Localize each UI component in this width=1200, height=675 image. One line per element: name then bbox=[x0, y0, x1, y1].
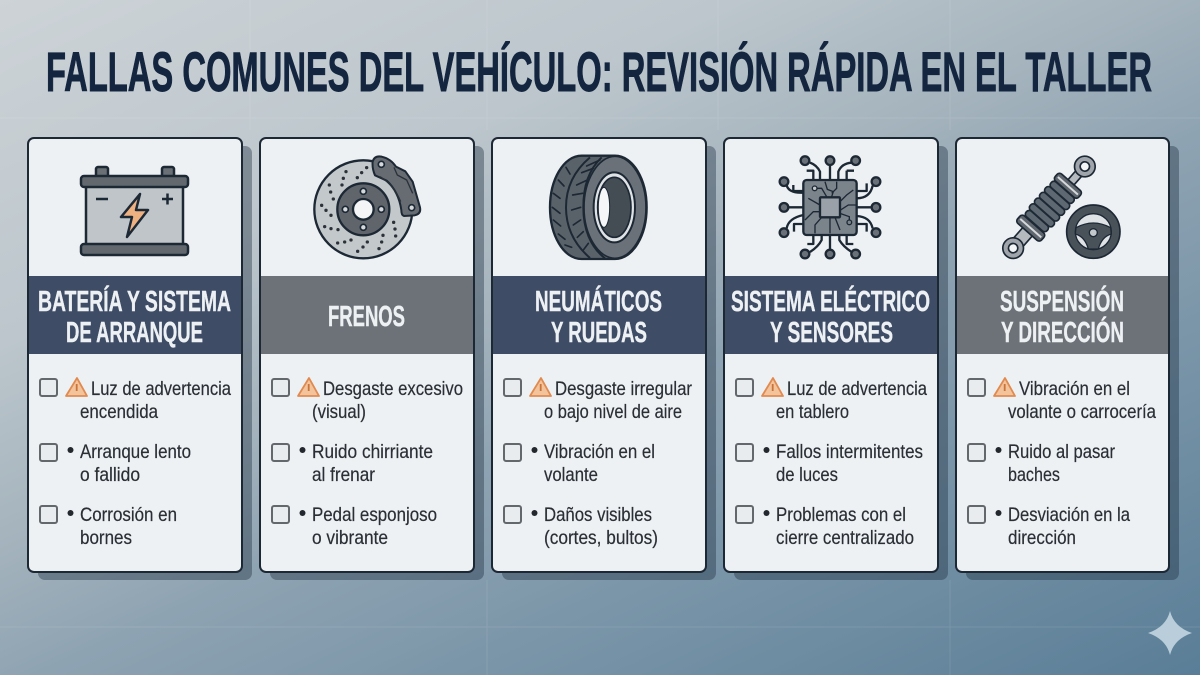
checklist: suspensión: baches bbox=[1008, 464, 1060, 486]
icon: battery bbox=[81, 167, 188, 255]
checklist: neumáticos: Vibración en el bbox=[544, 441, 655, 463]
panel: frenos bbox=[260, 138, 484, 580]
checklist: sistema eléctrico: Luz de advertencia bbox=[787, 378, 927, 400]
checklist: neumáticos: (cortes, bultos) bbox=[544, 527, 658, 549]
checklist: batería: Corrosión en bbox=[80, 504, 177, 526]
checklist: neumáticos: volante bbox=[544, 464, 598, 486]
header: sistema eléctrico: SISTEMA ELÉCTRICO bbox=[731, 284, 930, 318]
icon: shock absorber and steering wheel bbox=[994, 148, 1120, 266]
header: batería: BATERÍA Y SISTEMA bbox=[38, 284, 231, 318]
panel: suspensión y dirección bbox=[956, 138, 1179, 580]
header: neumáticos bbox=[493, 276, 705, 354]
checklist: batería: Arranque lento bbox=[80, 441, 191, 463]
checklist: frenos: o vibrante bbox=[312, 527, 388, 549]
checklist: neumáticos: Daños visibles bbox=[544, 504, 652, 526]
header: neumáticos: NEUMÁTICOS bbox=[535, 284, 662, 318]
icon: circuit chip bbox=[780, 156, 880, 258]
checklist: sistema eléctrico: cierre centralizado bbox=[776, 527, 914, 549]
header: sistema eléctrico: Y SENSORES bbox=[770, 317, 893, 349]
checklist: suspensión bbox=[968, 378, 1156, 549]
checklist: batería: Luz de advertencia bbox=[91, 378, 231, 400]
header: batería: DE ARRANQUE bbox=[66, 317, 203, 349]
checklist: frenos: Pedal esponjoso bbox=[312, 504, 437, 526]
checklist: neumáticos: Desgaste irregular bbox=[555, 378, 692, 400]
checklist: sistema eléctrico: Fallos intermitentes bbox=[776, 441, 923, 463]
checklist: frenos: al frenar bbox=[312, 464, 375, 486]
checklist: suspensión: volante o carrocería bbox=[1008, 401, 1156, 423]
checklist: sistema eléctrico: en tablero bbox=[776, 401, 849, 423]
checklist: neumáticos: o bajo nivel de aire bbox=[544, 401, 682, 423]
header: suspensión: Y DIRECCIÓN bbox=[1001, 315, 1124, 349]
checklist: batería: bornes bbox=[80, 527, 132, 549]
checklist: batería bbox=[40, 378, 231, 549]
checklist: neumáticos bbox=[504, 378, 692, 549]
header: batería bbox=[29, 276, 241, 354]
checklist: sistema eléctrico: de luces bbox=[776, 464, 838, 486]
icon: brake disc bbox=[314, 156, 420, 258]
checklist: suspensión: Ruido al pasar bbox=[1008, 441, 1115, 463]
panel: sistema eléctrico y sensores bbox=[724, 138, 948, 580]
checklist: batería: encendida bbox=[80, 401, 158, 423]
checklist: frenos bbox=[272, 378, 463, 549]
checklist: suspensión: dirección bbox=[1008, 527, 1076, 549]
checklist: frenos: (visual) bbox=[312, 401, 366, 423]
header: frenos: FRENOS bbox=[328, 301, 405, 333]
header: neumáticos: Y RUEDAS bbox=[551, 317, 647, 349]
icon: sparkle watermark bbox=[1148, 611, 1192, 655]
header: suspensión bbox=[957, 276, 1168, 354]
header: suspensión: SUSPENSIÓN bbox=[1000, 284, 1124, 318]
checklist: batería: o fallido bbox=[80, 464, 140, 486]
icon: tyre bbox=[550, 156, 647, 259]
checklist: sistema eléctrico bbox=[736, 378, 927, 549]
checklist: sistema eléctrico: Problemas con el bbox=[776, 504, 906, 526]
panel: batería y sistema de arranque bbox=[28, 138, 252, 580]
panel: neumáticos y ruedas bbox=[492, 138, 716, 580]
checklist: suspensión: Desviación en la bbox=[1008, 504, 1130, 526]
checklist: frenos: Desgaste excesivo bbox=[323, 378, 463, 400]
header: sistema eléctrico bbox=[725, 276, 937, 354]
header: frenos bbox=[261, 276, 473, 354]
checklist: suspensión: Vibración en el bbox=[1019, 378, 1130, 400]
checklist: frenos: Ruido chirriante bbox=[312, 441, 433, 463]
